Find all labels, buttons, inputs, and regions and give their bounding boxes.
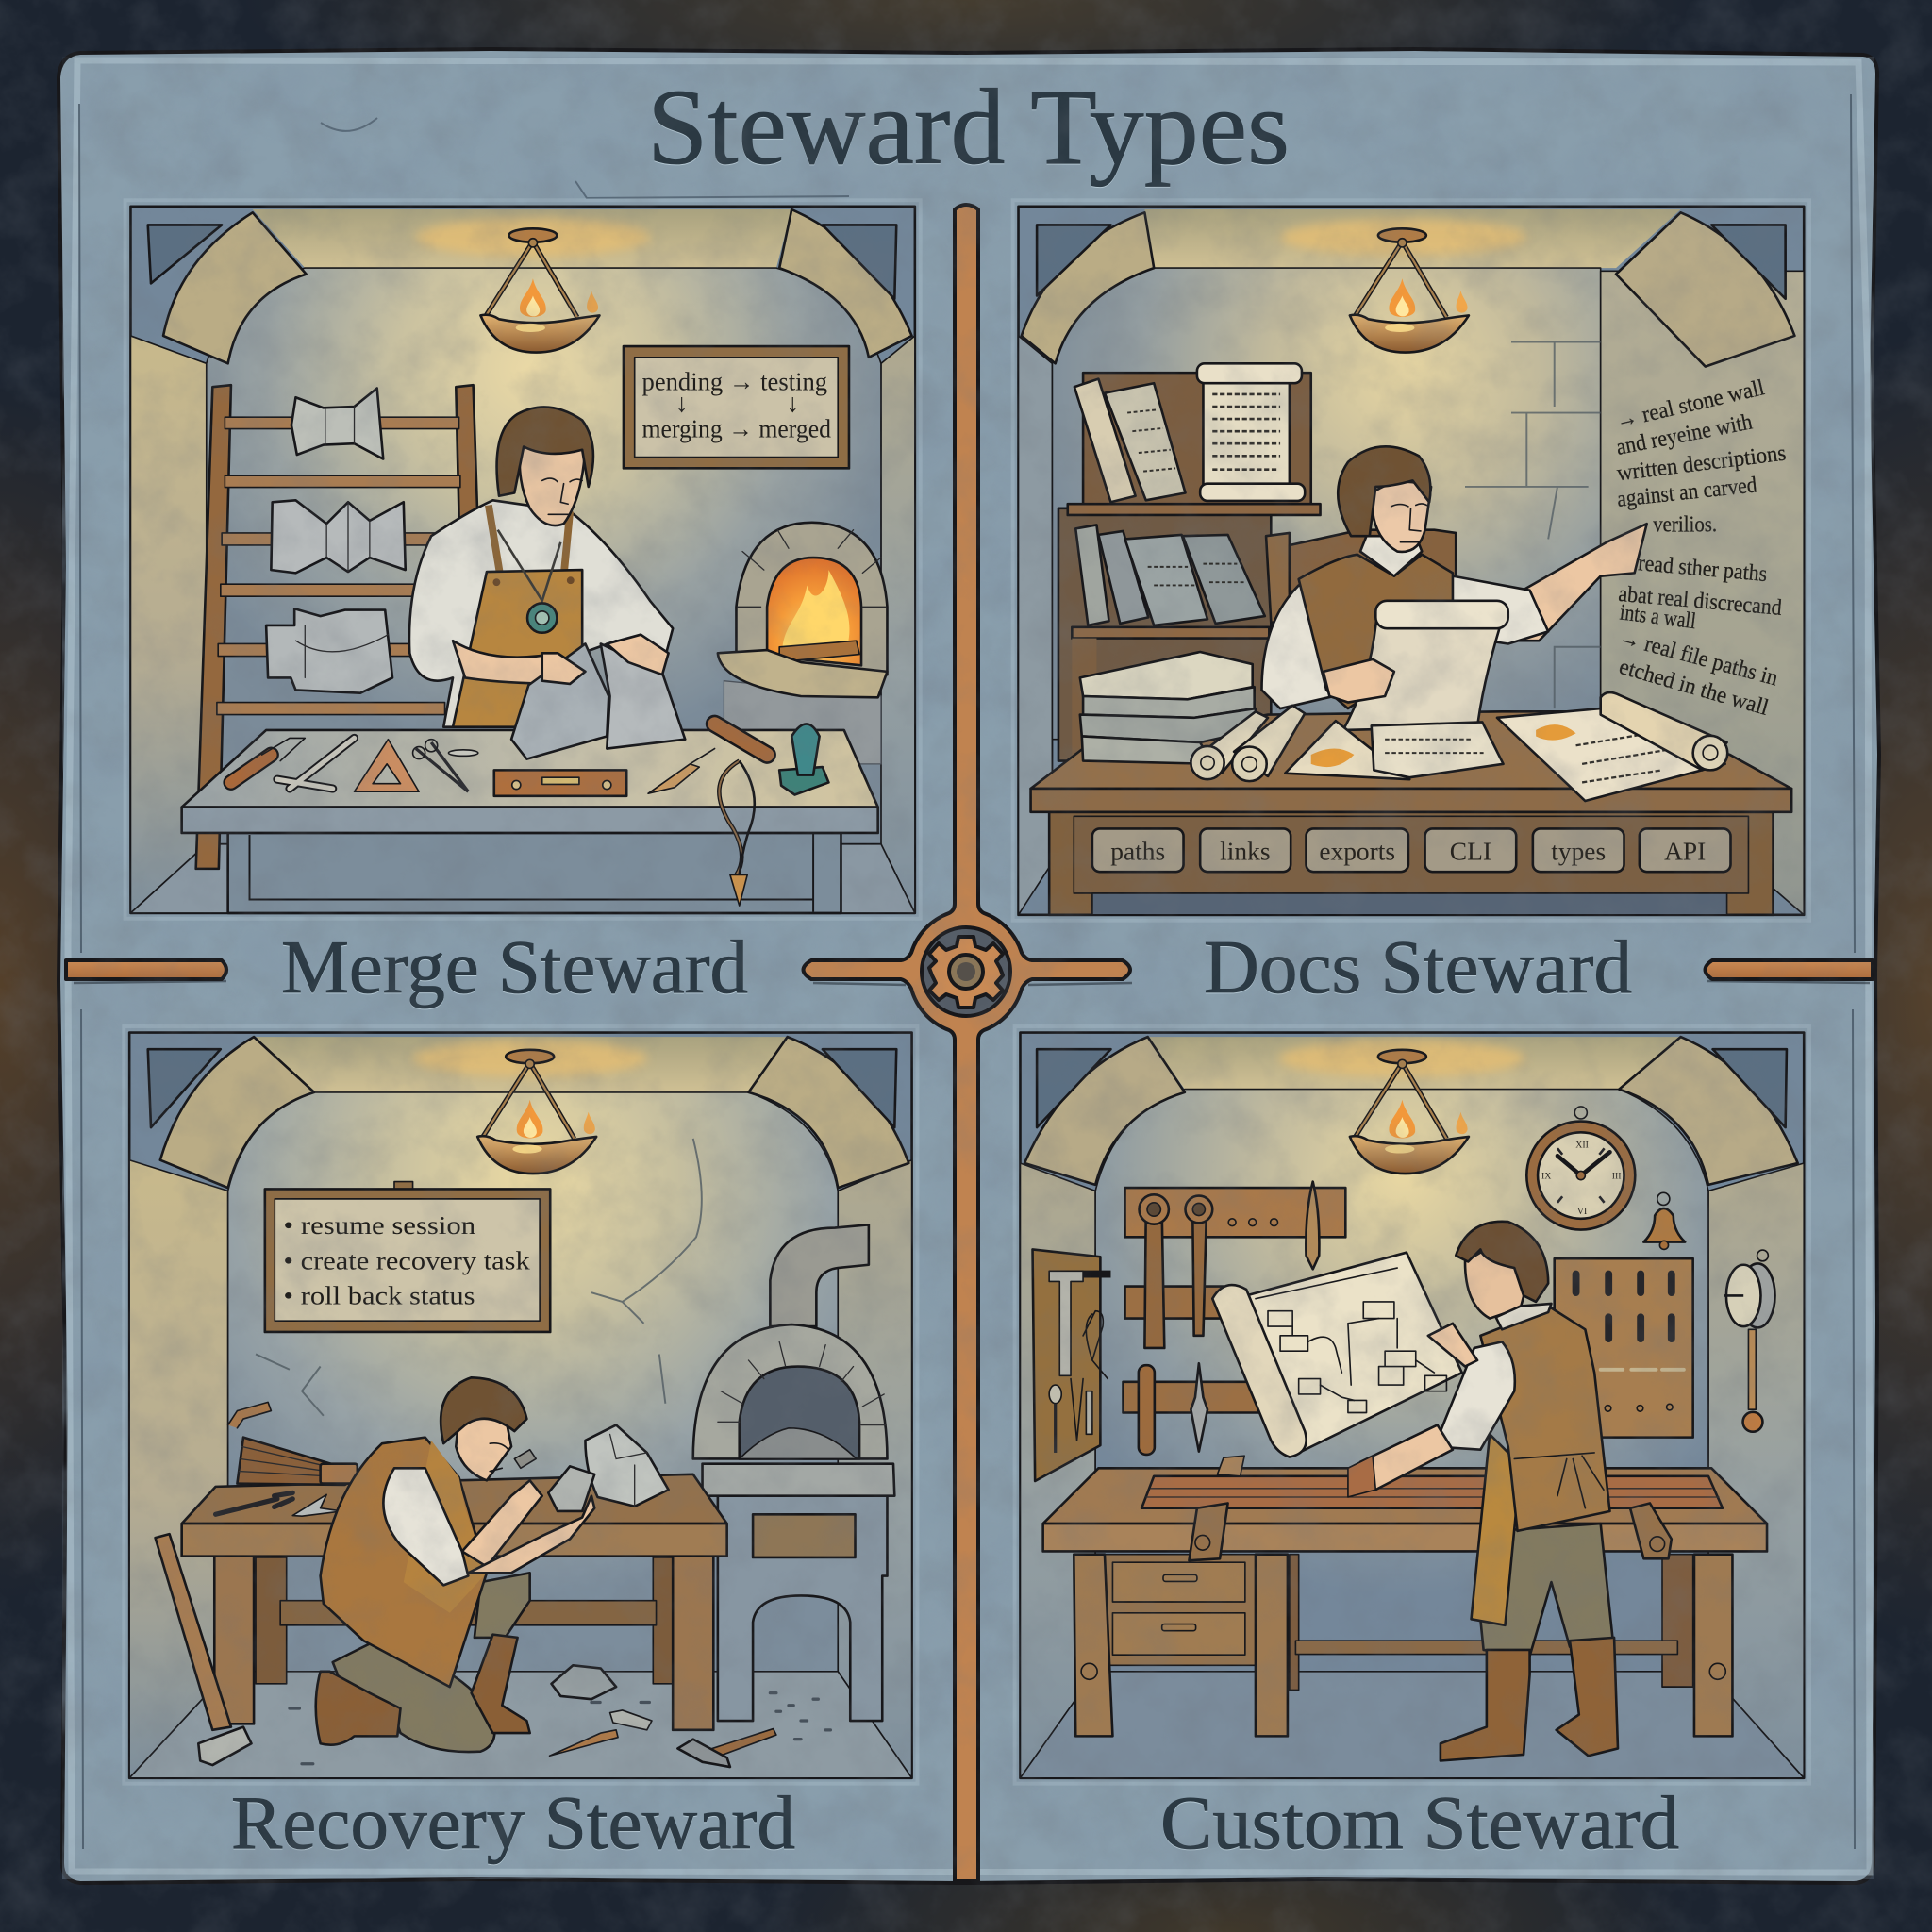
hammer leaning <box>156 1534 251 1765</box>
gauge with pendulum <box>1724 1250 1775 1432</box>
panel: custom steward <box>1015 1026 1809 1784</box>
wall text carved on stone <box>1613 375 1788 721</box>
panel: recovery room shell <box>124 1026 917 1784</box>
desk tags: API <box>1664 838 1706 866</box>
title: Steward Types <box>647 67 1290 187</box>
icon: ceiling lamp <box>480 228 599 353</box>
fireplace <box>718 523 887 764</box>
wall text carved on stone: abat real discrecand <box>1617 581 1783 621</box>
icon: ceiling lamp <box>477 1050 596 1174</box>
desk tags: paths <box>1110 838 1165 866</box>
copper horizontal strip right <box>1706 960 1873 979</box>
workbench <box>182 1474 727 1730</box>
right pegboard <box>1555 1258 1693 1438</box>
left pegboard with tools <box>1033 1249 1110 1481</box>
heading: Docs Steward: Docs Steward <box>1204 926 1632 1009</box>
wall text carved on stone: → real stone wall <box>1613 375 1767 434</box>
sign: recovery options: • resume session <box>283 1211 476 1240</box>
bellows, wrench and blade on bench <box>216 1402 358 1516</box>
desk tags <box>1092 828 1730 872</box>
icon: wall clock: VI <box>1577 1207 1587 1217</box>
blueprint scroll <box>1212 1253 1462 1457</box>
heading: Recovery Steward: Recovery Steward <box>231 1782 795 1865</box>
rock on bench <box>585 1425 669 1507</box>
sign: state flow: pending → testing <box>642 367 827 395</box>
sign: recovery options <box>265 1182 550 1332</box>
panel: recovery steward <box>124 1026 917 1784</box>
tools on bench <box>231 724 828 906</box>
desk tags: links <box>1220 838 1271 866</box>
desk <box>1031 711 1791 915</box>
papers on desk <box>1285 692 1727 801</box>
panel: custom room shell <box>1015 1026 1809 1784</box>
wooden rack with stone blocks <box>196 385 477 869</box>
sign: recovery options: • roll back status <box>283 1282 475 1310</box>
sign: state flow <box>624 346 849 468</box>
desk tags: types <box>1551 838 1606 866</box>
icon: wall clock: XII <box>1575 1141 1589 1151</box>
panel: merge room shell <box>125 200 921 919</box>
stack of documents <box>1080 652 1305 781</box>
man pointing at wall <box>1261 446 1647 708</box>
panel: docs steward <box>1013 200 1809 921</box>
carpenter from behind <box>1348 1222 1618 1760</box>
icon: ceiling lamp <box>1350 228 1469 353</box>
wall text carved on stone: against an carved <box>1616 472 1758 512</box>
sign: state flow: ↓ <box>786 389 799 417</box>
copper horizontal strip left <box>66 960 226 979</box>
furnace with pipe <box>693 1224 894 1721</box>
kneeling man with lens <box>316 1377 594 1752</box>
icon: wall clock <box>1526 1107 1635 1230</box>
icon: bell <box>1643 1192 1685 1249</box>
wall text carved on stone: verilios. <box>1653 512 1717 538</box>
desk tags: CLI <box>1450 838 1491 866</box>
wall text carved on stone: read sther paths <box>1637 550 1768 587</box>
upper wall bars with wrenches <box>1124 1182 1345 1455</box>
copper cross <box>804 205 1130 1881</box>
wall text carved on stone: and reyeine with <box>1614 408 1755 460</box>
scroll held by man <box>1324 601 1508 730</box>
desk tags: exports <box>1319 838 1395 866</box>
icon: ceiling lamp <box>1350 1050 1469 1174</box>
wall text carved on stone: etched in the wall <box>1616 654 1772 721</box>
panel: merge steward <box>125 200 921 919</box>
icon: wall clock: III <box>1612 1171 1622 1181</box>
sign: state flow: ↓ <box>675 389 689 417</box>
carpenter bench <box>1043 1456 1767 1736</box>
bookshelf with books and scrolls <box>1058 363 1321 761</box>
sign: state flow: merging → merged <box>642 415 831 443</box>
floor debris <box>290 1665 830 1767</box>
sign: recovery options: • create recovery task <box>283 1246 530 1274</box>
stone block being joined <box>511 635 685 759</box>
wall text carved on stone: ints a wall <box>1619 600 1697 634</box>
stone workbench <box>182 730 878 913</box>
icon: wall clock: IX <box>1541 1171 1551 1181</box>
heading: Custom Steward: Custom Steward <box>1160 1782 1679 1865</box>
heading: Merge Steward: Merge Steward <box>281 926 748 1009</box>
gear medallion <box>922 927 1010 1016</box>
wall text carved on stone: written descriptions <box>1615 441 1788 486</box>
man at work <box>409 407 673 727</box>
panel: docs room shell <box>1013 200 1809 921</box>
wall text carved on stone: → real file paths in <box>1616 625 1781 691</box>
